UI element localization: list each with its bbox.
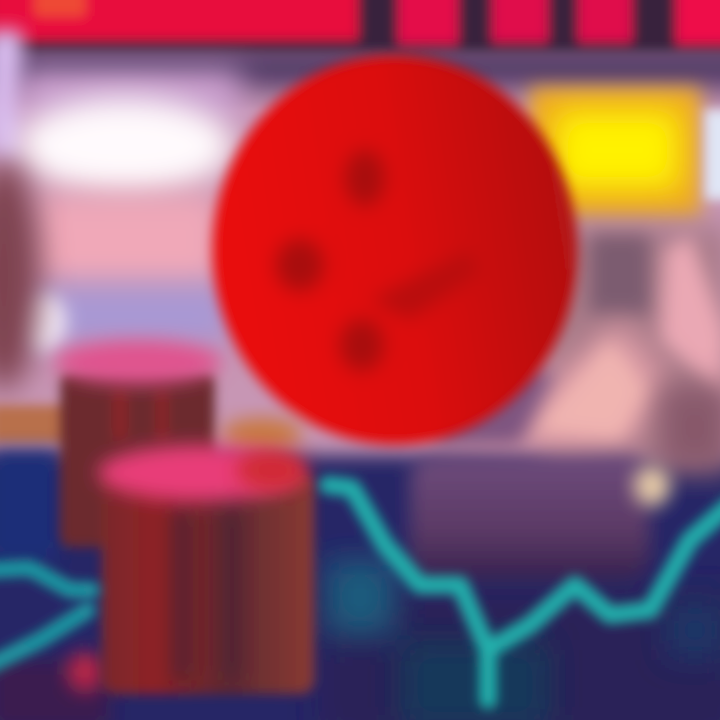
bottom dark ground — [0, 560, 720, 720]
teal chart line left — [0, 568, 92, 665]
top awning band — [0, 0, 720, 52]
orange ledge behind front cylinder — [222, 418, 302, 450]
purple cylinder — [410, 370, 670, 580]
sphere dark dimples — [276, 150, 480, 371]
right lower mauve peaks — [410, 225, 720, 470]
yellow sign — [530, 88, 720, 218]
teal chart line right — [328, 485, 720, 700]
front cylinder — [98, 445, 314, 694]
back cylinder — [54, 340, 222, 547]
left storefront — [0, 30, 240, 560]
red sphere — [212, 55, 578, 445]
